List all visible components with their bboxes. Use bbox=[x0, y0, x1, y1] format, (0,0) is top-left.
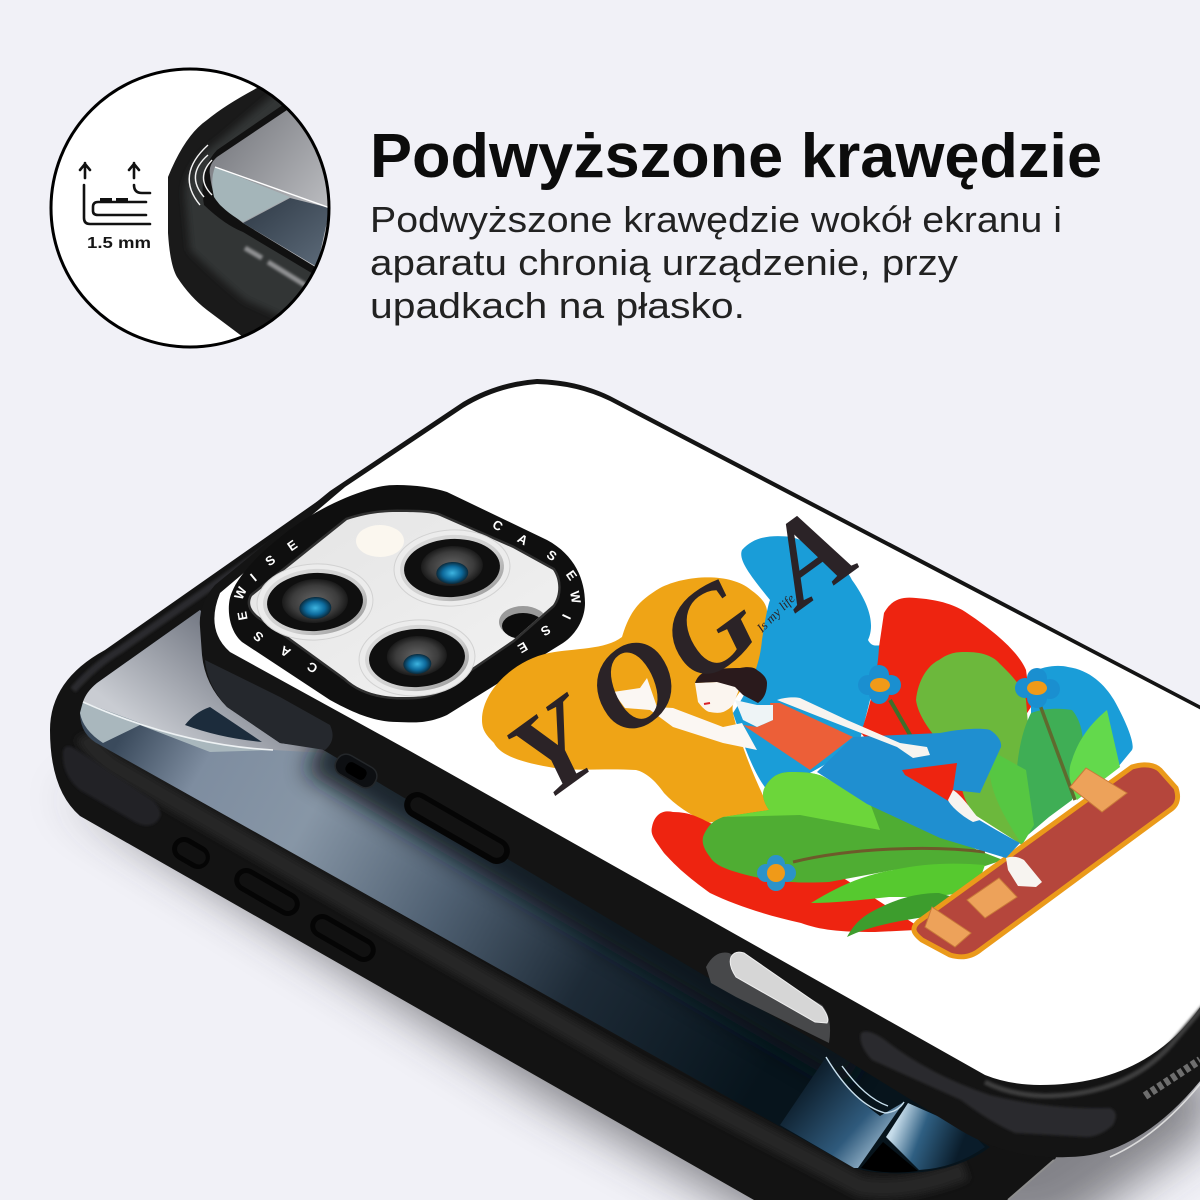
icon: flash bbox=[356, 525, 404, 557]
body text bbox=[370, 199, 1062, 326]
upper phone: black case body bbox=[200, 379, 1200, 1157]
heading: Podwyższone krawędzie bbox=[370, 122, 1102, 191]
camera ring lettering: CASEWISE: A bbox=[277, 642, 293, 660]
camera bump: glass plate bbox=[250, 512, 558, 697]
upper phone: mute switch bbox=[331, 750, 381, 792]
camera ring lettering: CASEWISE: S bbox=[250, 628, 266, 645]
lower phone: side buttons bbox=[168, 833, 380, 966]
icon: raised edge diagram bbox=[80, 163, 150, 224]
camera ring lettering: CASEWISE bbox=[231, 517, 584, 676]
lower phone: glass screen seen through the case bbox=[80, 610, 990, 1173]
lower phone: screen reflection glow bbox=[780, 1057, 985, 1172]
artwork: colour blobs bbox=[482, 536, 1133, 932]
camera ring lettering: CASEWISE: W bbox=[231, 584, 250, 602]
artwork: YOGA script lettering: Is my life bbox=[753, 591, 798, 636]
lower phone: black case frame bbox=[50, 482, 1056, 1200]
artwork: YOGA script lettering bbox=[485, 479, 879, 823]
icon: sensor hole bbox=[499, 606, 544, 638]
icon: camera lens left bbox=[255, 561, 375, 643]
camera ring lettering: CASEWISE: E bbox=[284, 537, 300, 554]
lower phone: carbon corner pad bbox=[63, 746, 160, 826]
camera ring lettering: CASEWISE: A bbox=[515, 531, 531, 549]
camera ring lettering: CASEWISE: I bbox=[559, 612, 574, 622]
camera ring lettering: CASEWISE: S bbox=[262, 552, 278, 569]
icon: camera lens bottom bbox=[357, 617, 477, 699]
upper phone: long button bbox=[399, 787, 515, 869]
artwork: YOGA script lettering: O bbox=[560, 607, 706, 763]
body text: Podwyższone krawędzie wokół ekranu i bbox=[370, 199, 1062, 240]
artwork: foliage bbox=[703, 652, 1120, 937]
artwork: yoga figure bbox=[613, 667, 1042, 887]
artwork: YOGA script lettering: A bbox=[733, 479, 879, 635]
icon label: 1.5 mm: 1.5 mm bbox=[87, 235, 151, 252]
camera ring lettering: CASEWISE: E bbox=[515, 639, 530, 656]
upper phone: side wall details bbox=[205, 660, 1200, 1157]
camera ring lettering: CASEWISE: W bbox=[567, 590, 584, 605]
body text: aparatu chronią urządzenie, przy bbox=[370, 242, 958, 283]
camera ring lettering: CASEWISE: C bbox=[304, 658, 320, 676]
artwork: yoga mat bbox=[914, 765, 1178, 957]
artwork: YOGA script lettering: G bbox=[635, 552, 781, 708]
inset circle: raised edge close-up bbox=[50, 68, 340, 348]
artwork: wooden blocks bbox=[925, 768, 1127, 947]
camera ring lettering: CASEWISE: C bbox=[490, 517, 506, 535]
upper phone: white back with printed artwork area bbox=[214, 384, 1200, 1085]
upper phone: silver port bbox=[706, 952, 830, 1043]
icon: camera lens right bbox=[392, 527, 512, 609]
artwork: flowers bbox=[757, 665, 1060, 891]
camera ring lettering: CASEWISE: S bbox=[544, 547, 560, 564]
camera ring lettering: CASEWISE: E bbox=[234, 610, 251, 621]
camera bump: black ring bbox=[229, 485, 585, 722]
camera ring lettering: CASEWISE: S bbox=[538, 622, 553, 639]
camera ring lettering: CASEWISE: I bbox=[247, 570, 260, 584]
camera ring lettering: CASEWISE: E bbox=[563, 567, 580, 583]
body text: upadkach na płasko. bbox=[370, 285, 745, 326]
artwork: YOGA script lettering: Y bbox=[485, 669, 629, 823]
drop shadow under phone bbox=[60, 790, 1200, 1200]
